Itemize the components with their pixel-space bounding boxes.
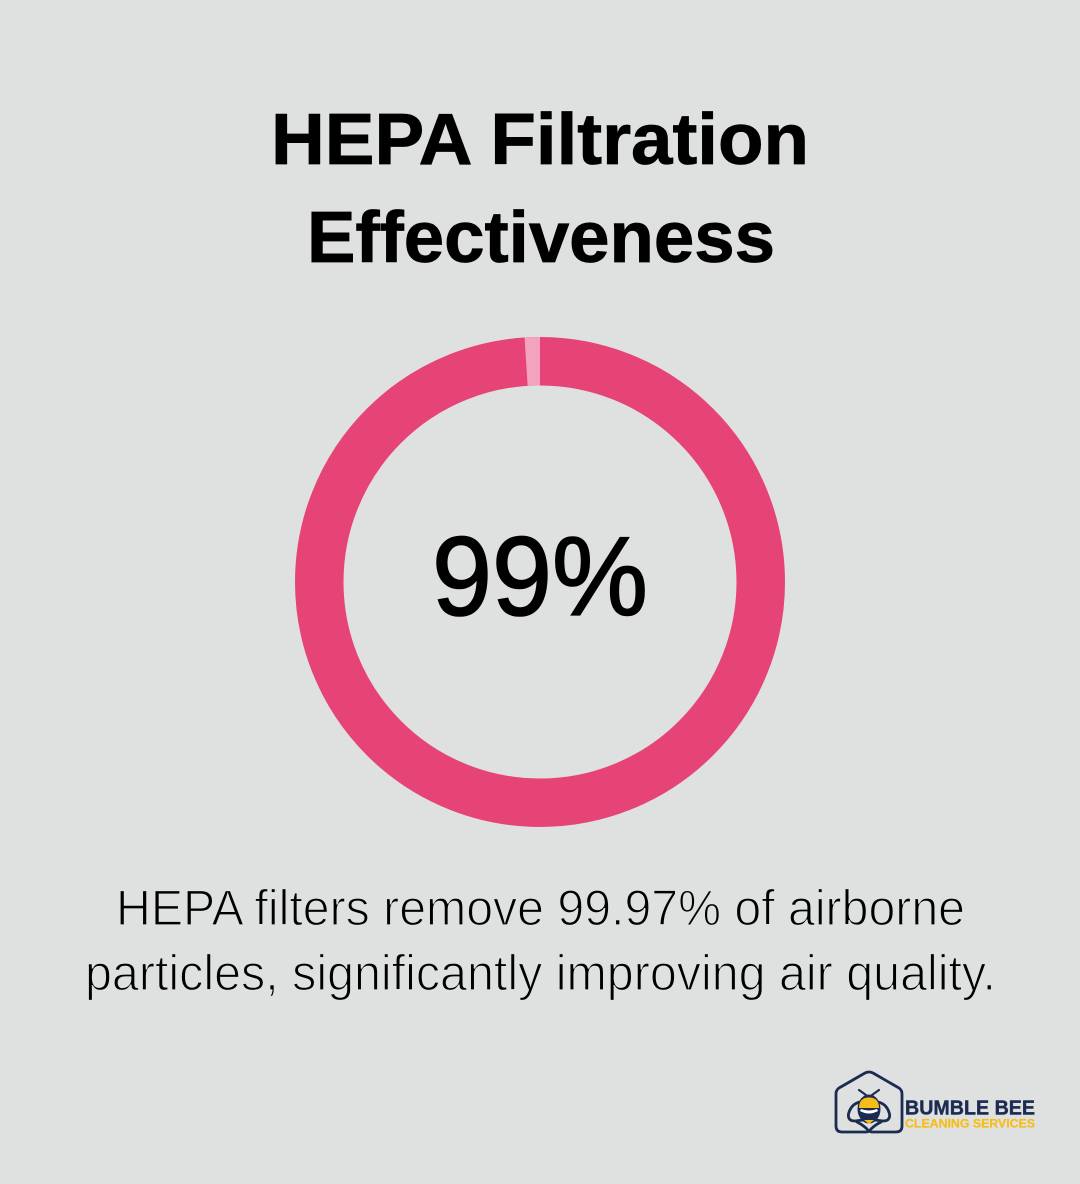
title: Effectiveness xyxy=(307,198,775,278)
description text: particles, significantly improving air quality. xyxy=(85,945,996,1001)
center value: 99% xyxy=(432,514,648,639)
title: HEPA Filtration xyxy=(271,100,809,180)
title xyxy=(271,100,809,278)
donut chart: 99% xyxy=(319,361,761,803)
logo: Bumble Bee Cleaning Services xyxy=(836,1072,1035,1132)
icon: house with bee xyxy=(836,1072,902,1132)
brand name: BUMBLE BEE xyxy=(905,1098,1035,1120)
description text: HEPA filters remove 99.97% of airborne xyxy=(116,880,965,936)
description text xyxy=(85,880,996,1001)
brand tagline: CLEANING SERVICES xyxy=(905,1116,1035,1130)
